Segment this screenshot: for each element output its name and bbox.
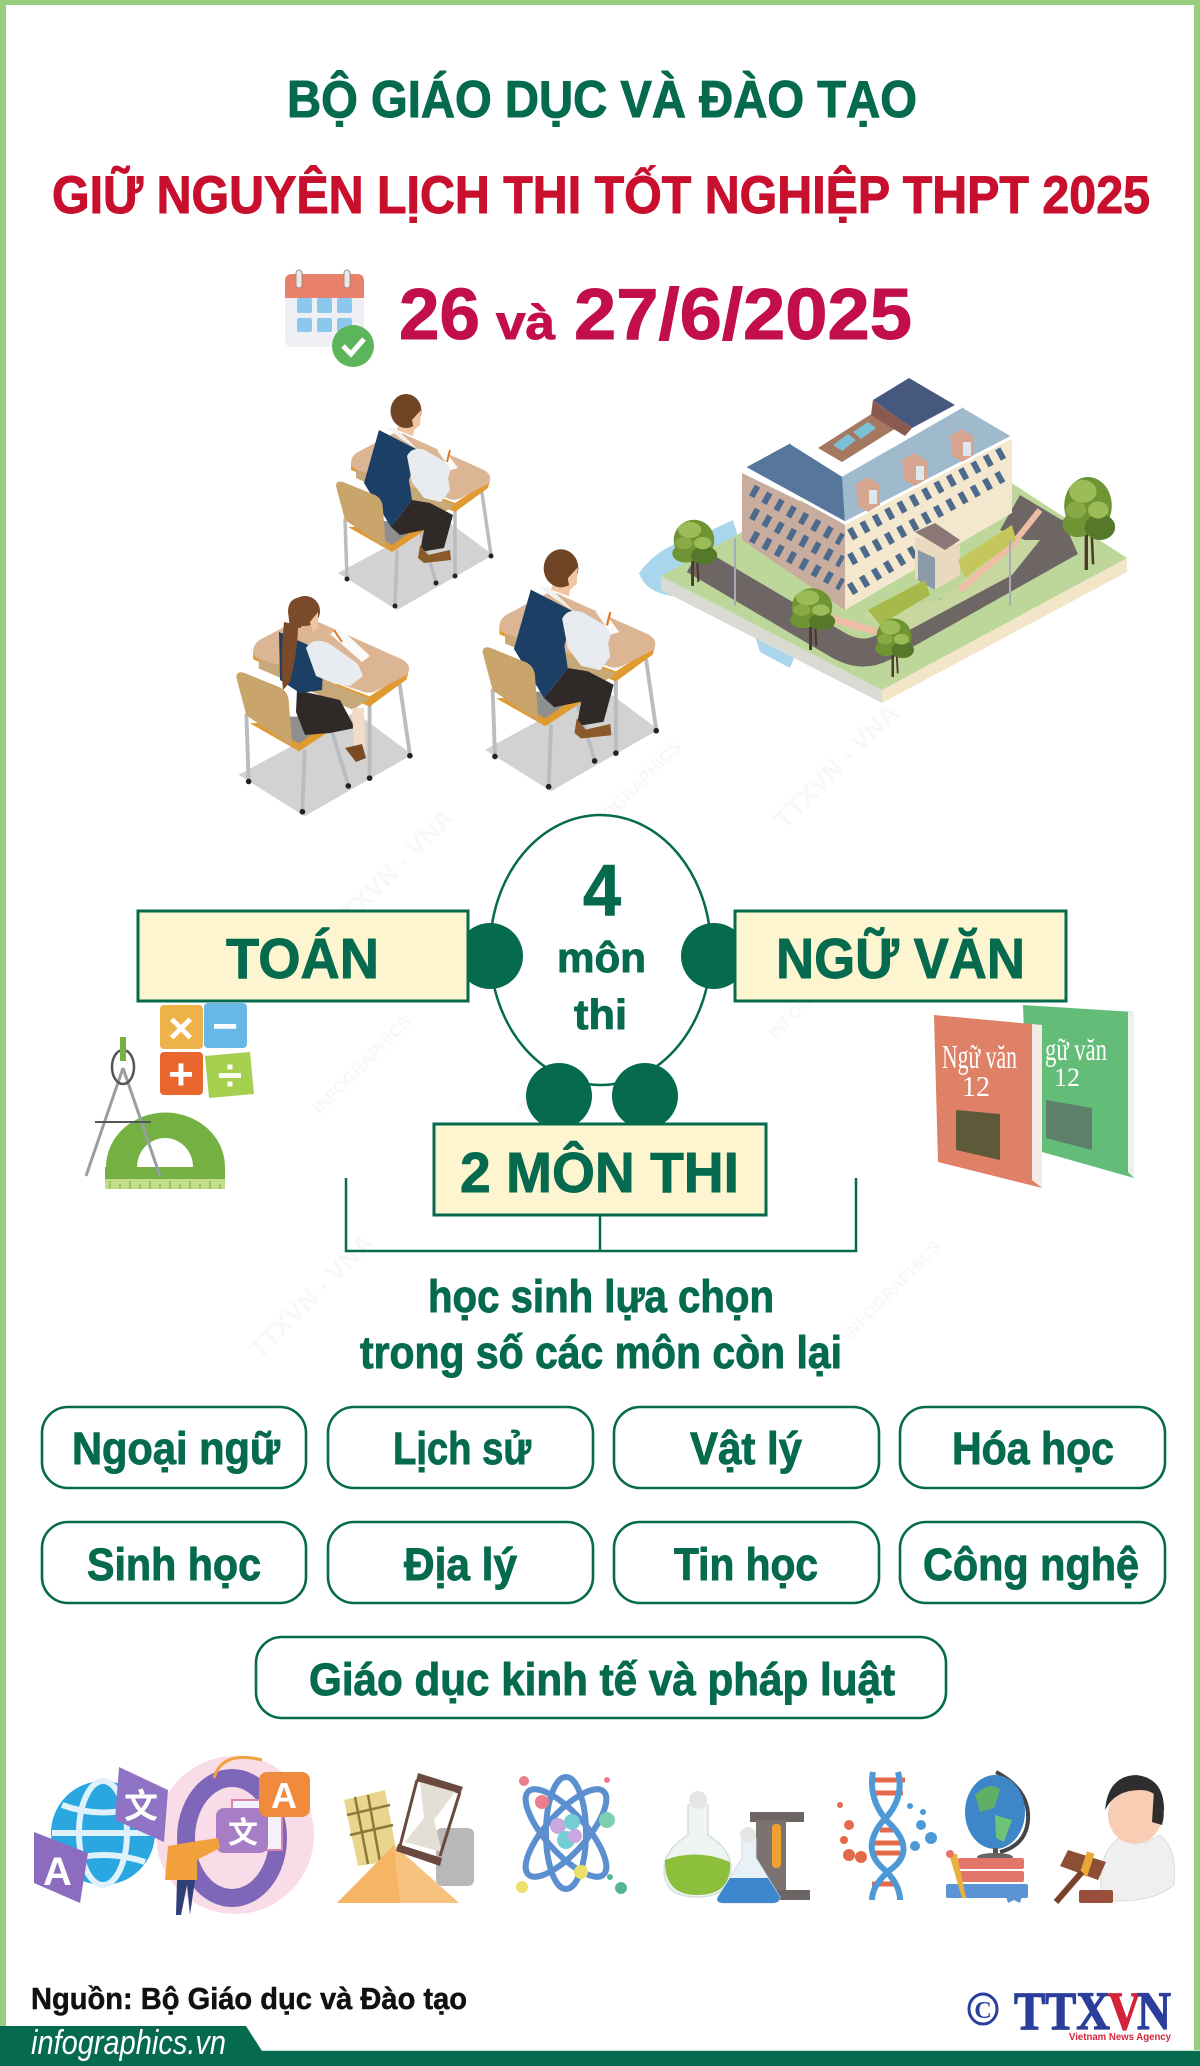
date heading: 26 bbox=[399, 275, 480, 355]
box: Toan bbox=[138, 911, 468, 1001]
date heading bbox=[399, 275, 912, 355]
box: 2 mon thi: 2 MÔN THI bbox=[460, 1140, 739, 1205]
footer band bbox=[0, 2024, 1200, 2066]
icon: Ngu van textbooks: 12 bbox=[1054, 1063, 1080, 1092]
central oval: 4 mon thi: môn bbox=[557, 934, 646, 981]
date heading: 27/6/2025 bbox=[574, 275, 912, 355]
logo TTXVN: TTX bbox=[1014, 1981, 1110, 2041]
icon: math tools: + bbox=[168, 1050, 194, 1099]
watermarks: TTXVN - VNA bbox=[323, 802, 460, 939]
icon: physics atom bbox=[514, 1776, 627, 1894]
watermarks: TTXVN - VNA bbox=[243, 1227, 380, 1364]
subject pills: Ngoại ngữ bbox=[72, 1423, 280, 1474]
date heading: và bbox=[496, 297, 555, 350]
subject pills: Lịch sử bbox=[393, 1423, 531, 1474]
subject pills: Sinh học bbox=[87, 1539, 261, 1590]
box: 2 mon thi bbox=[434, 1124, 766, 1215]
icon: foreign language: A bbox=[271, 1775, 297, 1816]
icon: calendar bbox=[285, 270, 374, 367]
icon: foreign language: 文 bbox=[228, 1817, 258, 1850]
logo TTXVN: V bbox=[1108, 1981, 1141, 2041]
subject pills: Tin học bbox=[674, 1539, 818, 1590]
watermarks: INFOGRAPHICS bbox=[579, 737, 685, 843]
watermarks: INFOGRAPHICS bbox=[764, 937, 870, 1043]
footer band: infographics.vn bbox=[31, 2024, 226, 2062]
icon: foreign language bbox=[34, 1756, 314, 1915]
title line 1: BỘ GIÁO DỤC VÀ ĐÀO TẠO bbox=[287, 70, 917, 129]
subject pills: Giáo dục kinh tế và pháp luật bbox=[309, 1654, 895, 1705]
icon: foreign language: A bbox=[43, 1850, 72, 1894]
box: Toan: TOÁN bbox=[226, 927, 379, 991]
watermarks: INFOGRAPHICS bbox=[309, 1012, 415, 1118]
icon: history bbox=[337, 1773, 474, 1903]
subject pills: Địa lý bbox=[404, 1539, 517, 1590]
text: students choose: trong số các môn còn lại bbox=[360, 1327, 842, 1378]
central oval: 4 mon thi bbox=[457, 815, 747, 1129]
icon: math tools: − bbox=[212, 1002, 238, 1051]
text: students choose bbox=[360, 1271, 842, 1378]
icon: Ngu van textbooks: Ngữ văn bbox=[942, 1039, 1017, 1076]
logo TTXVN: Vietnam News Agency bbox=[1069, 2032, 1171, 2043]
icon: geography globe bbox=[946, 1772, 1028, 1903]
icon: Ngu van textbooks: 12 bbox=[962, 1072, 990, 1103]
illustration: student top bbox=[336, 394, 494, 610]
watermarks bbox=[243, 697, 945, 1364]
diagram connector bracket bbox=[346, 1178, 856, 1251]
illustration: student girl bbox=[236, 596, 413, 816]
box: Ngu Van bbox=[735, 911, 1066, 1001]
logo TTXVN bbox=[969, 1981, 1171, 2043]
subject pills bbox=[42, 1407, 1165, 1718]
subject pills: Vật lý bbox=[690, 1423, 802, 1474]
central oval: 4 mon thi: 4 bbox=[583, 851, 621, 931]
icon: math tools bbox=[86, 1002, 254, 1189]
watermarks: TTXVN - VNA bbox=[768, 697, 905, 834]
subject pills: Công nghệ bbox=[923, 1539, 1139, 1590]
central oval: 4 mon thi: thi bbox=[574, 991, 627, 1038]
icon: chemistry flasks bbox=[664, 1791, 810, 1903]
icon: math tools: × bbox=[168, 1004, 194, 1053]
logo TTXVN: N bbox=[1137, 1981, 1171, 2041]
logo TTXVN: C bbox=[974, 1998, 992, 2024]
icon: Ngu van textbooks: gữ văn bbox=[1045, 1031, 1107, 1067]
illustration: student right bbox=[483, 549, 659, 791]
icon: math tools: ÷ bbox=[218, 1051, 242, 1100]
subject pills: Hóa học bbox=[952, 1423, 1114, 1474]
icon: Ngu van textbooks bbox=[934, 1005, 1134, 1188]
watermarks: TTXVN - VNA bbox=[513, 987, 650, 1124]
text: students choose: học sinh lựa chọn bbox=[428, 1271, 774, 1322]
watermarks: INFOGRAPHICS bbox=[839, 1237, 945, 1343]
box: Ngu Van: NGỮ VĂN bbox=[776, 927, 1025, 991]
icon: law person and gavel bbox=[1056, 1775, 1175, 1903]
icon: foreign language: 文 bbox=[124, 1788, 158, 1826]
icon: biology DNA bbox=[837, 1772, 937, 1900]
footer source: Nguồn: Bộ Giáo dục và Đào tạo bbox=[31, 1981, 467, 2016]
illustration: school building bbox=[639, 378, 1127, 703]
